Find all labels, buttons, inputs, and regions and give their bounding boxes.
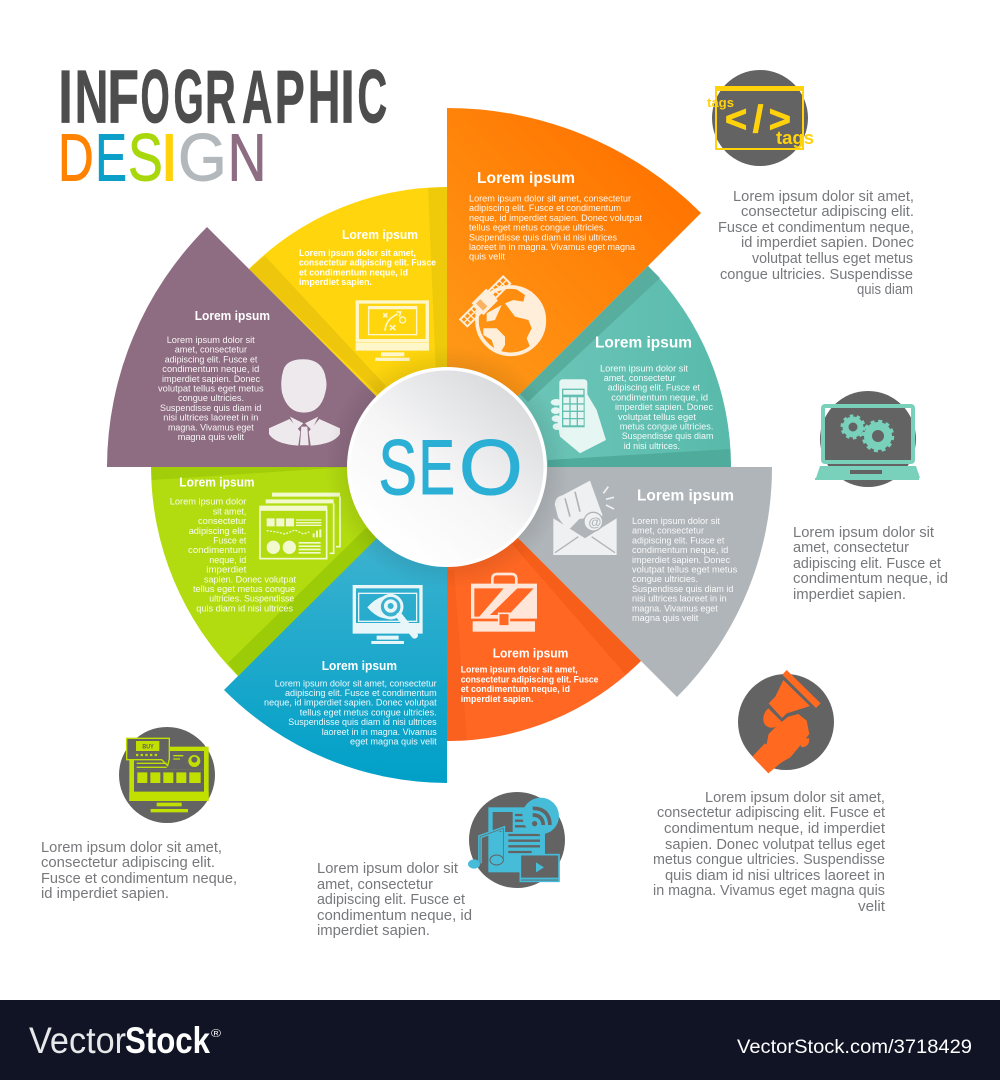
text block: adipiscing elit. Fusce et condimentum [469,203,621,214]
text block: tellus eget metus congue ultricies. [300,707,437,718]
text block: right middle: condimentum neque, id [793,571,948,587]
title: INFOGRAPHIC: O [140,54,170,138]
panel: teal wedge [447,266,731,467]
text block: bottom middle: Lorem ipsum dolor sit [317,861,458,877]
footer logo: Vector [29,1020,126,1061]
icon: strategy monitor [356,302,429,361]
icon: briefcase [471,574,537,632]
footer link text: VectorStock.com/3718429 [737,1036,972,1058]
text block: ultricies. Suspendisse [209,594,294,605]
icon: tags window: tags [707,95,734,110]
text block: bottom right: Lorem ipsum dolor sit amet, [705,790,885,806]
title: INFOGRAPHIC: F [107,54,139,138]
text block [632,516,737,624]
text block: top right: congue ultricies. Suspendisse [720,267,913,283]
text block: bottom middle: imperdiet sapien. [317,923,430,939]
text block: Lorem ipsum dolor sit amet, consectetur [275,678,437,689]
text block: tellus eget metus congue [193,584,295,595]
icon: online store monitor: BUY [142,744,154,751]
title: INFOGRAPHIC: I [340,54,355,138]
text block: right middle: amet, consectetur [793,540,909,556]
heading: Lorem ipsum [195,308,270,323]
icon: satellite and globe [458,274,545,354]
text block: sapien. Donec volutpat [204,574,296,585]
icon: laptop with gears [815,391,920,487]
text block: Fusce et [213,536,247,546]
heading: Lorem ipsum [477,170,575,187]
title: INFOGRAPHIC: N [75,54,108,138]
panel: green wedge [151,467,447,676]
icon: tags window [707,70,814,166]
heading: Lorem ipsum [179,475,255,490]
text block: bottom left: consectetur adipiscing elit. [41,855,215,871]
icon: eye and magnifier monitor [353,587,423,644]
text block: bottom left: id imperdiet sapien. [41,886,169,902]
text block: neque, id [209,555,246,566]
text block: quis diam id nisi ultrices [196,603,293,614]
text block: tellus eget metus congue ultricies. [469,223,606,234]
footer logo: ® [211,1028,221,1040]
text block: bottom middle [317,861,472,939]
text block: top right: id imperdiet sapien. Donec [741,235,914,251]
text block: bottom left: Fusce et condimentum neque, [41,871,237,887]
text block: magna quis velit [632,613,699,624]
icon: tags window: tags [776,128,814,148]
text block: nisi ultrices laoreet in in [632,594,727,605]
text block: magna. Vivamus eget [168,422,254,433]
panel: purple wedge [107,227,447,467]
text block: Suspendisse quis diam id nisi ultrices [288,717,437,728]
icon: tags window: </> [725,99,791,141]
title: INFOGRAPHIC [58,54,387,138]
text block: volutpat tellus eget metus [632,564,737,576]
label: SEO: O [459,423,523,511]
text block [158,335,264,443]
title: INFOGRAPHIC: I [58,54,73,138]
title: DESIGN: I [160,120,179,196]
text block: Lorem ipsum dolor sit [167,335,255,346]
text block: et condimentum neque, id [461,684,570,695]
text block: volutpat tellus eget [618,412,696,423]
text block: top right [718,189,914,298]
text block: adipiscing elit. Fusce et [608,383,700,394]
text block: imperdiet sapien. Donec [162,374,260,385]
icon: hand with megaphone [738,670,834,773]
text block [469,194,642,263]
icon: online store monitor [119,727,215,823]
text block: bottom right: consectetur adipiscing elit. Fusce et [657,805,885,821]
text block: top right: Lorem ipsum dolor sit amet, [733,189,914,205]
SEO hub [347,367,547,567]
text block: Lorem ipsum dolor sit amet, consectetur [469,194,632,204]
text block: adipiscing elit. Fusce et [632,535,725,546]
text block: right middle: Lorem ipsum dolor sit [793,525,934,541]
text block: imperdiet [206,565,247,576]
text block: adipiscing elit. Fusce et [165,354,258,365]
title: INFOGRAPHIC: R [205,54,236,138]
text block: bottom left: Lorem ipsum dolor sit amet, [41,840,222,856]
text block: volutpat tellus eget metus [158,384,264,394]
text block [600,363,713,452]
text block: et condimentum neque, id [299,267,408,278]
icon: megaphone and envelope [553,481,617,555]
panel: blue wedge [224,467,447,783]
heading: Lorem ipsum [342,227,418,242]
text block: Suspendisse quis diam id [632,584,733,595]
footer bar [0,1000,1000,1080]
title: INFOGRAPHIC: C [357,54,387,138]
text block: Lorem ipsum dolor sit [600,363,688,374]
chart: SEO wheel [107,108,772,783]
text block: Lorem ipsum dolor sit amet, [299,248,416,259]
text block: magna. Vivamus eget [632,603,718,614]
heading: Lorem ipsum [322,658,397,673]
text block: neque, id imperdiet sapien. Donec volutpat [469,213,642,224]
icon: media document, RSS, music, video [468,792,565,888]
title: INFOGRAPHIC: P [275,54,305,138]
text block: metus congue ultricies. [620,422,713,432]
footer logo: Stock [125,1020,210,1061]
heading: Lorem ipsum [637,488,734,505]
text block: amet, consectetur [175,345,248,356]
text block: imperdiet sapien. Donec [632,555,730,566]
text block: condimentum neque, id [611,392,708,403]
icon: businessman [269,359,340,446]
text block: top right: consectetur adipiscing elit. [741,204,914,220]
text block: condimentum neque, id [162,364,259,375]
text block: bottom right: sapien. Donec volutpat tellus eget [665,837,885,853]
text block: sit amet, [213,506,246,517]
panel: yellow wedge [249,187,447,467]
text block: id nisi ultrices. [624,441,680,452]
text block: bottom right: condimentum neque, id imperdiet [664,821,885,837]
text block: consectetur adipiscing elit. Fusce [299,258,436,269]
panel: orange wedge [447,108,701,467]
title: DESIGN: S [128,120,163,196]
text block: bottom middle: adipiscing elit. Fusce et [317,892,465,908]
title: DESIGN [58,120,266,196]
text block: laoreet in in magna. Vivamus eget magna [469,242,636,253]
text block: bottom right: in magna. Vivamus eget magna quis [653,883,885,899]
text block: right middle: imperdiet sapien. [793,587,906,603]
text block: quis velit [469,252,505,263]
label: SEO: E [418,423,455,511]
text block: Suspendisse quis diam id [160,403,261,414]
text block [461,665,598,705]
title: DESIGN: N [228,120,266,196]
text block: condimentum neque, id [632,545,728,556]
text block: Lorem ipsum dolor sit amet, [461,665,578,676]
text block: magna quis velit [178,432,244,443]
text block: eget magna quis velit [350,736,437,748]
text block: adipiscing elit. Fusce et condimentum [285,688,437,699]
text block: bottom middle: condimentum neque, id [317,908,472,924]
text block: laoreet in in magna. Vivamus [322,727,437,738]
text block: Suspendisse quis diam id nisi ultrices [469,232,617,243]
text block: right middle: adipiscing elit. Fusce et [793,556,941,572]
label: SEO [378,423,523,511]
title: INFOGRAPHIC: A [242,54,272,138]
text block: amet, consectetur [604,373,676,384]
title: DESIGN: E [95,120,127,196]
text block: bottom middle: amet, consectetur [317,877,433,893]
icon: phone in hand [551,379,606,453]
text block: bottom right [653,790,885,915]
text block: top right: quis diam [857,282,913,298]
text block: amet, consectetur [632,526,705,537]
text block: imperdiet sapien. [461,694,533,705]
text block: right middle [793,525,948,603]
text block: condimentum [188,545,246,556]
text block: top right: volutpat tellus eget metus [752,251,913,267]
text block [264,678,437,748]
title: DESIGN: G [178,120,227,196]
label: SEO: S [378,423,417,511]
icon: megaphone and envelope: @ [588,515,601,530]
text block: bottom right: quis diam id nisi ultrices laoreet in [665,868,885,884]
text block: bottom right: velit [858,899,885,915]
text block: top right: Fusce et condimentum neque, [718,220,914,236]
text block: Lorem ipsum dolor [170,497,247,508]
text block: Suspendisse quis diam [622,431,713,442]
heading: Lorem ipsum [595,335,692,352]
text block: consectetur [198,516,247,527]
text block: adipiscing elit. [189,526,246,537]
wheel hub shadow [325,345,569,589]
text block: imperdiet sapien. [299,277,372,288]
panel: red-orange wedge [447,467,641,741]
title: INFOGRAPHIC: G [174,54,204,138]
text block: consectetur adipiscing elit. Fusce [461,674,598,685]
text block: Lorem ipsum dolor sit [632,516,720,527]
panel: grey wedge [447,467,772,697]
title: DESIGN: D [58,120,94,196]
footer logo [29,1020,221,1061]
text block: congue ultricies. [632,574,698,585]
text block: neque, id imperdiet sapien. Donec volutpat [264,698,437,709]
text block [299,248,436,288]
text block: nisi ultrices laoreet in in [163,413,258,424]
text block: congue ultricies. [178,393,244,404]
heading: Lorem ipsum [493,645,568,660]
icon: web pages report [259,493,340,559]
title: INFOGRAPHIC: H [308,54,340,138]
text block: imperdiet sapien. Donec [615,402,713,413]
text block: bottom right: metus congue ultricies. Suspendisse [653,852,885,868]
text block: bottom left [41,840,237,902]
text block [170,497,296,614]
